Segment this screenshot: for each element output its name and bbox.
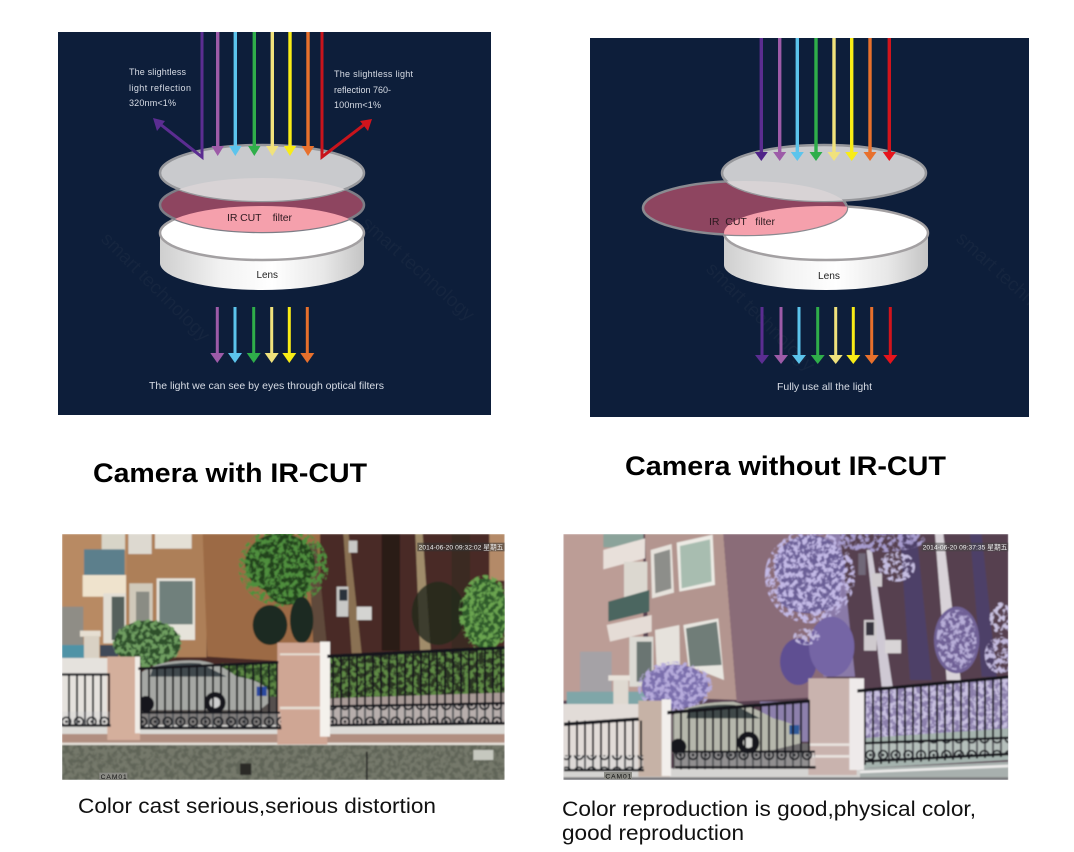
text: right reflection note: The slightless light [334,69,413,79]
lens: Lens [818,271,840,282]
IR CUT filter [158,189,366,234]
camera label: CAM01 [605,773,632,780]
photo: street view with IR-CUT [62,527,511,781]
arrow: reflected red light [322,32,372,157]
camera label: CAM01 [101,774,127,781]
heading: camera without IR-CUT: Camera without IR-CUT [625,451,947,481]
panel: camera with IR-CUT diagram: smart technology [96,229,214,346]
lens [160,206,364,290]
ground [563,762,1008,780]
camera label [604,772,632,779]
car [138,660,270,713]
tree trunks [823,534,997,687]
caption: with IR-CUT result: Color cast serious,serious distortion [78,795,436,818]
lens [724,206,928,290]
panel: camera without IR-CUT diagram [590,38,1074,417]
garden behind fence [328,647,505,700]
caption: without IR-CUT result: Color reproduction is good,physical color, [562,798,976,821]
timestamp: 2014-06-20 09:37:35 星期五 [923,543,1008,551]
caption: all light: Fully use all the light [777,381,872,393]
upper glass disc [158,144,366,202]
upper glass disc [720,144,928,202]
text: right reflection note [334,69,413,110]
iron fence [564,675,1008,771]
gate pillars [638,678,864,777]
iron fence [62,646,505,729]
arrow: reflected violet light [153,32,202,157]
caption: without IR-CUT result: good reproduction [562,822,744,845]
text: right reflection note: reflection 760- [334,85,391,95]
arrows: incoming light [755,38,896,161]
panel: camera without IR-CUT diagram: smart technology [701,259,819,376]
IR CUT filter: IR CUT filter [709,216,776,228]
photo: street view without IR-CUT [563,528,1015,780]
caption: visible light: The light we can see by eyes through optical filters [149,380,384,392]
ground and wall [62,725,505,780]
text: right reflection note: 100nm<1% [334,100,381,110]
arrows: all light out [755,307,897,364]
panel: camera without IR-CUT diagram: smart technology [952,228,1074,341]
arrows: visible light out [210,307,314,363]
text: left reflection note: light reflection [129,83,191,93]
text: left reflection note: The slightless [129,67,186,77]
timestamp: 2014-06-20 09:32:02 星期五 [419,543,504,551]
lens: Lens [256,270,278,281]
purple foliage [638,528,1015,712]
garden behind fence [860,677,1008,740]
gate pillars [107,642,330,744]
IR CUT filter: IR CUT filter [227,212,292,224]
tree trunks [308,534,505,653]
text: left reflection note [129,67,191,108]
panel: camera with IR-CUT diagram [58,32,491,415]
IR CUT filter [643,181,847,235]
tree foliage [113,527,511,667]
car [670,702,802,755]
arrows: incoming light [212,32,314,156]
caption: without IR-CUT result [562,798,976,845]
text: left reflection note: 320nm<1% [129,98,176,108]
panel: camera with IR-CUT diagram: smart technology [357,213,479,326]
heading: camera with IR-CUT: Camera with IR-CUT [93,458,368,488]
